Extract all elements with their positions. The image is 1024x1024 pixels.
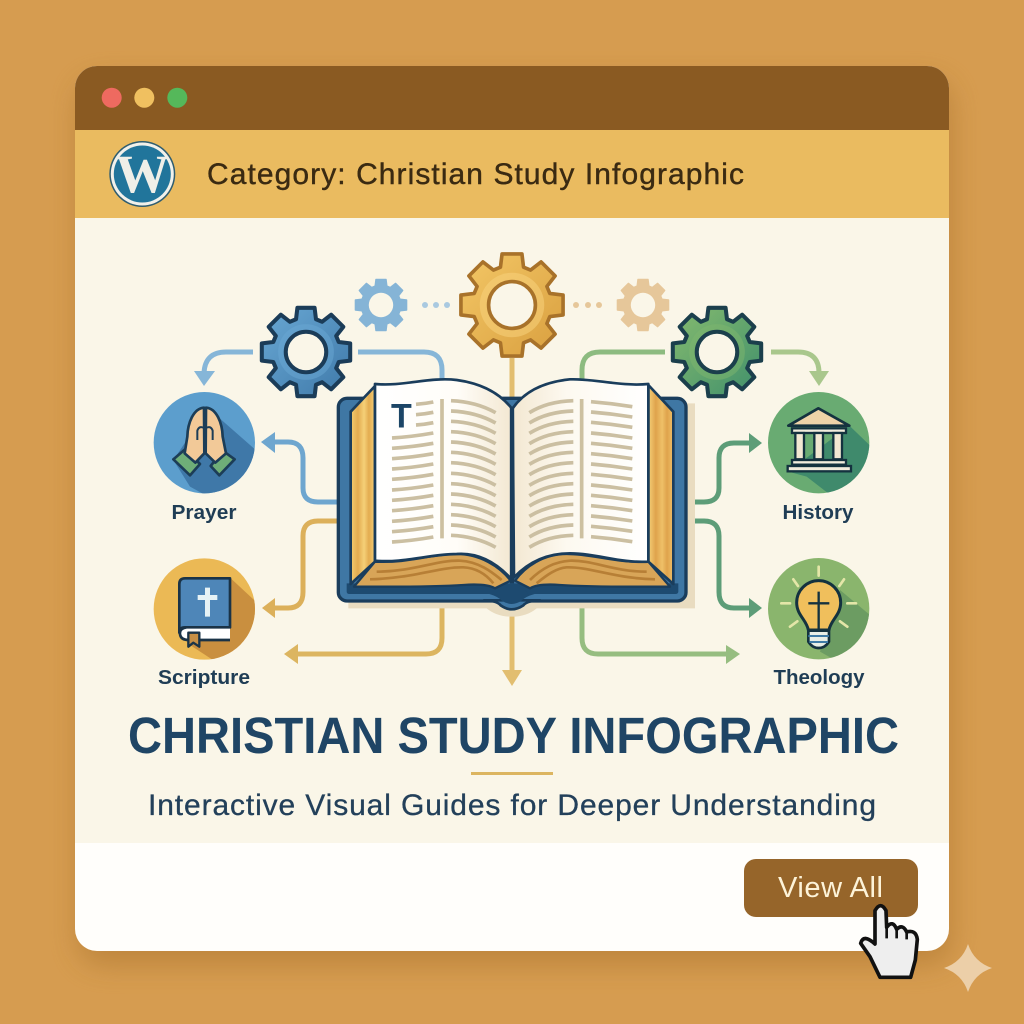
right page <box>513 379 648 577</box>
icon: history <box>768 392 870 494</box>
dots: left <box>422 302 450 308</box>
right page block <box>515 554 670 588</box>
icon: small tan gear <box>617 279 669 331</box>
heading: category: Category: Christian Study Infographic <box>207 158 744 191</box>
page block stripes <box>370 561 655 583</box>
label: History: History <box>782 502 854 524</box>
icon: small blue gear <box>355 279 407 331</box>
dots: right <box>573 302 602 308</box>
icon: blue gear <box>262 308 350 396</box>
arrow: green gear to history <box>771 352 829 386</box>
icon: WordPress logo: W <box>115 144 169 204</box>
title: CHRISTIAN STUDY INFOGRAPHIC <box>128 707 899 764</box>
arrow: book to history <box>685 433 762 502</box>
connector: blue gear to book <box>358 352 442 385</box>
panel: browser window <box>75 66 949 977</box>
arrow: book to prayer <box>261 432 340 502</box>
icon: green gear <box>673 308 761 396</box>
label: Theology: Theology <box>774 667 865 689</box>
arrow: book downward <box>502 608 522 686</box>
window control dots <box>102 88 187 108</box>
arrow: book to theology <box>685 521 762 618</box>
arrow: book to lower right <box>582 600 740 664</box>
icon: scripture <box>154 558 255 660</box>
connector: green gear to book <box>582 352 665 385</box>
button: View All <box>744 859 918 917</box>
divider accent <box>471 772 553 775</box>
icon: prayer <box>154 392 255 494</box>
icon: hand cursor <box>861 906 917 977</box>
left page edge <box>351 386 375 584</box>
gears row <box>262 254 761 396</box>
subtitle: Interactive Visual Guides for Deeper Understanding <box>148 789 876 822</box>
arrow: book to lower left <box>284 600 442 664</box>
connector: gold gear to book <box>510 358 514 400</box>
drop capital: T <box>391 398 412 436</box>
label: Scripture: Scripture <box>158 667 250 689</box>
connector arrows <box>194 352 829 686</box>
label: Prayer: Prayer <box>172 502 237 524</box>
icon: sparkle <box>944 944 992 992</box>
right page edge <box>648 385 673 584</box>
icon: gold gear <box>461 254 563 356</box>
arrow: book to scripture <box>262 521 340 618</box>
icon: theology <box>768 558 870 660</box>
left page <box>375 379 512 579</box>
left page text lines <box>392 402 433 542</box>
left page block <box>354 554 511 588</box>
icon: open book <box>338 379 695 617</box>
right page text lines <box>529 401 573 547</box>
button: View All: View All <box>778 872 883 904</box>
book spine bulge <box>484 600 540 609</box>
arrow: blue gear to prayer <box>194 352 253 386</box>
